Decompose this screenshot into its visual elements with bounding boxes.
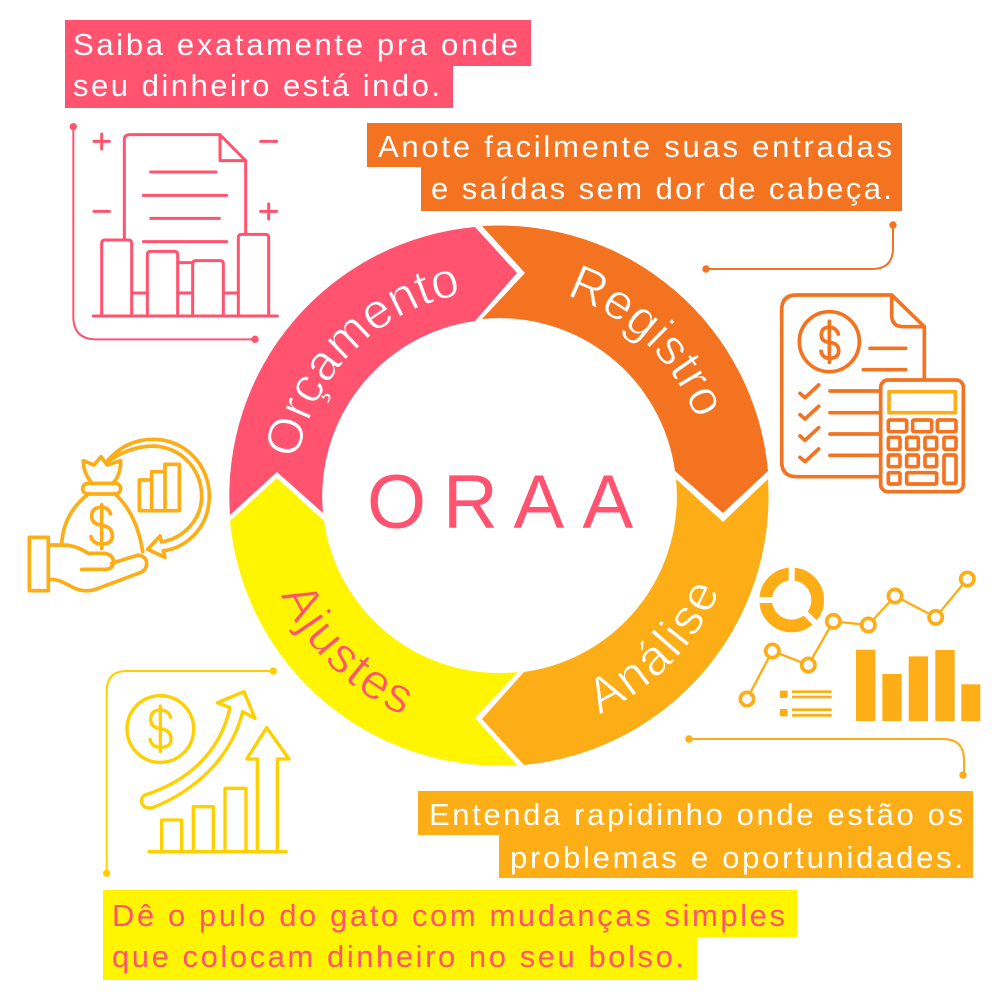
icon: analytics charts <box>740 563 980 721</box>
cycle ring <box>229 226 769 766</box>
icon: money bag in hand <box>29 439 209 591</box>
callout: orange <box>367 123 902 211</box>
segment: Ajustes <box>230 478 518 766</box>
segment: Registro: Registro <box>570 266 716 414</box>
callout: amber: Entenda rapidinho onde estão os <box>429 797 963 832</box>
icon: growth chart with coin <box>103 667 289 877</box>
bar chart <box>856 650 980 721</box>
icon: document with calculator <box>782 295 963 492</box>
callout: pink <box>65 20 531 108</box>
segment: Análise <box>482 479 769 765</box>
icon: document with bars <box>70 123 277 343</box>
connector: orange <box>702 221 897 273</box>
center title ORAA: ORAA <box>367 460 634 545</box>
segment: Orçamento: Orçamento <box>268 271 457 453</box>
callout: yellow <box>103 890 797 980</box>
line chart <box>740 572 974 706</box>
callout: pink: Saiba exatamente pra onde <box>73 27 518 62</box>
legend <box>780 690 832 717</box>
callout: orange: e saídas sem dor de cabeça. <box>431 171 892 206</box>
connector: amber <box>685 735 967 779</box>
callout: pink: seu dinheiro está indo. <box>73 68 440 103</box>
callout: amber: problemas e oportunidades. <box>510 840 963 875</box>
segment: Análise: Análise <box>596 585 716 714</box>
callout: yellow: Dê o pulo do gato com mudanças simples <box>112 898 785 933</box>
donut chart <box>755 563 818 626</box>
segment: Orçamento <box>229 227 517 515</box>
callout: yellow: que colocam dinheiro no seu bolso. <box>112 939 684 974</box>
callout: amber <box>418 791 973 878</box>
callout: orange: Anote facilmente suas entradas <box>378 129 892 164</box>
segment: Ajustes: Ajustes <box>280 592 410 712</box>
segment: Registro <box>482 226 768 513</box>
